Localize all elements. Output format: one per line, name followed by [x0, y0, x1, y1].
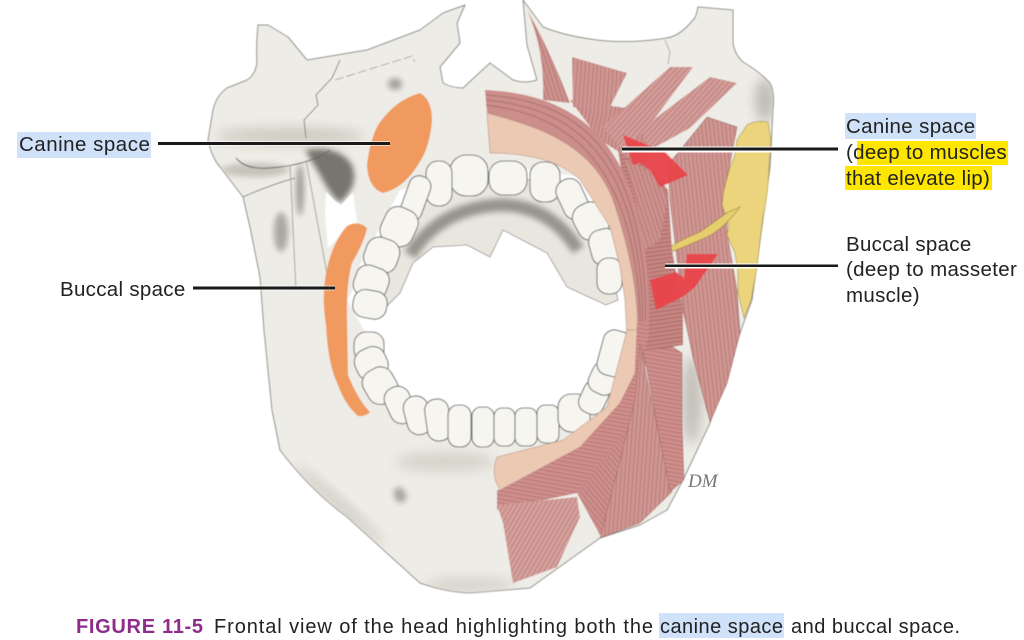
leader line: canine space, right — [622, 146, 838, 152]
label: buccal space, right: (deep to masseter — [846, 258, 1017, 281]
label: buccal space, right: muscle) — [846, 284, 920, 307]
label: buccal space, right: Buccal space — [846, 233, 972, 256]
caption: FIGURE 11-5 — [76, 616, 203, 638]
palate — [378, 180, 618, 315]
caption — [76, 613, 960, 638]
signature: DM — [687, 471, 719, 492]
lower teeth — [350, 327, 633, 447]
canine space highlight, left — [367, 93, 432, 193]
muscle mass at fan base — [570, 100, 662, 165]
zygomatic muscle fan, inner — [603, 67, 693, 150]
mentalis muscle — [497, 497, 580, 583]
upper teeth — [350, 155, 624, 321]
leader line: buccal space, left — [193, 286, 335, 290]
caption: Frontal view of the head highlighting both the — [214, 616, 653, 638]
levator fan — [572, 57, 627, 113]
parotid fat and duct — [657, 121, 771, 318]
white gap beside the maxilla — [325, 192, 357, 248]
red arrow, canine space — [623, 135, 688, 187]
leader line: canine space, left — [158, 141, 390, 146]
lower lip lining — [494, 330, 637, 490]
label: canine space, right — [845, 113, 1008, 190]
lower orbicularis muscle band — [497, 322, 648, 510]
depressor muscle, central sheet — [600, 345, 672, 538]
skull and mandible bone — [208, 0, 775, 593]
upper lip lining — [487, 113, 638, 340]
label: canine space, right: that elevate lip) — [846, 167, 990, 190]
label: canine space, right: Canine space — [846, 115, 976, 138]
label: buccal space, right — [846, 233, 1017, 307]
label: canine space, left: Canine space — [19, 133, 150, 156]
upper orbicularis muscle band — [485, 90, 649, 340]
red arrow, buccal space — [650, 254, 718, 310]
caption: and buccal space. — [791, 616, 960, 638]
mouth opening — [347, 165, 628, 430]
depressor muscle, triangular sheet — [577, 430, 627, 535]
label: canine space, right: (deep to muscles — [846, 141, 1007, 164]
anatomical illustration — [208, 0, 775, 593]
buccal space highlight, left — [324, 223, 370, 416]
depressor muscle, outer sheet — [643, 347, 684, 492]
cheek muscles (buccinator) — [618, 150, 683, 352]
caption: canine space — [660, 616, 783, 638]
masseter muscle — [668, 117, 740, 422]
label: buccal space, left: Buccal space — [60, 278, 186, 301]
zygomatic muscle fan, outer — [640, 77, 737, 150]
leader line: buccal space, right — [665, 264, 838, 268]
elevator muscle of the lip, lateral — [625, 160, 668, 250]
levator muscle from nasal bone — [527, 10, 570, 103]
